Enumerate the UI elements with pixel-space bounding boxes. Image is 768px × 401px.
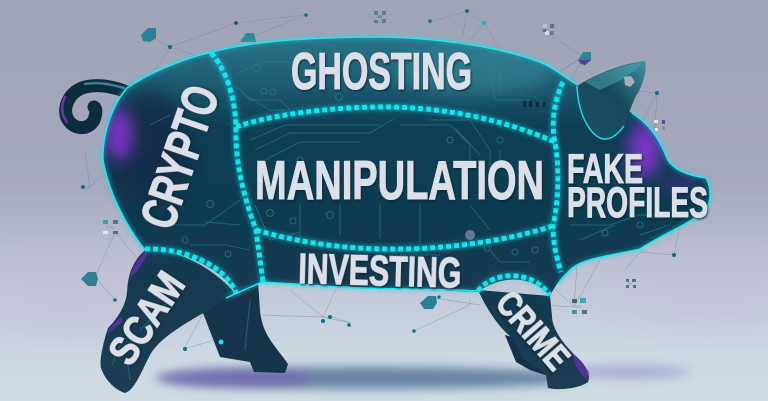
icon: tail (62, 83, 127, 128)
divider: rump (211, 53, 263, 282)
divider: front leg (478, 276, 550, 295)
divider: manipulation bottom (256, 226, 553, 249)
label: SCAM: SCAM (98, 263, 194, 373)
label: CRIME: CRIME (488, 284, 577, 378)
pig body (101, 37, 710, 393)
label: CRYPTO: CRYPTO (129, 78, 230, 236)
purple highlights (105, 44, 702, 210)
purple leg edges (107, 252, 589, 380)
circuit traces (112, 50, 680, 380)
floor shadow (155, 366, 690, 389)
label: FAKE: FAKE (567, 145, 643, 192)
icon: hexagons (81, 28, 591, 309)
icon: glowing node on leg (218, 340, 224, 344)
label: MANIPULATION: MANIPULATION (255, 149, 544, 211)
ear (577, 61, 646, 139)
divider: manipulation top (236, 107, 555, 142)
pig rear legs behind (203, 282, 560, 376)
label: GHOSTING: GHOSTING (291, 43, 472, 101)
dotted cut lines (145, 53, 563, 295)
icon: cube clusters (103, 11, 665, 314)
divider: shoulder (553, 82, 563, 272)
chip marks (465, 101, 546, 240)
body glowing outline (103, 37, 710, 298)
network nodes (83, 11, 680, 349)
label: INVESTING: INVESTING (298, 245, 462, 298)
front leg: scam (101, 250, 236, 393)
divider: rear leg (145, 249, 236, 293)
torso silhouette (103, 37, 710, 296)
front leg: crime (478, 290, 589, 389)
